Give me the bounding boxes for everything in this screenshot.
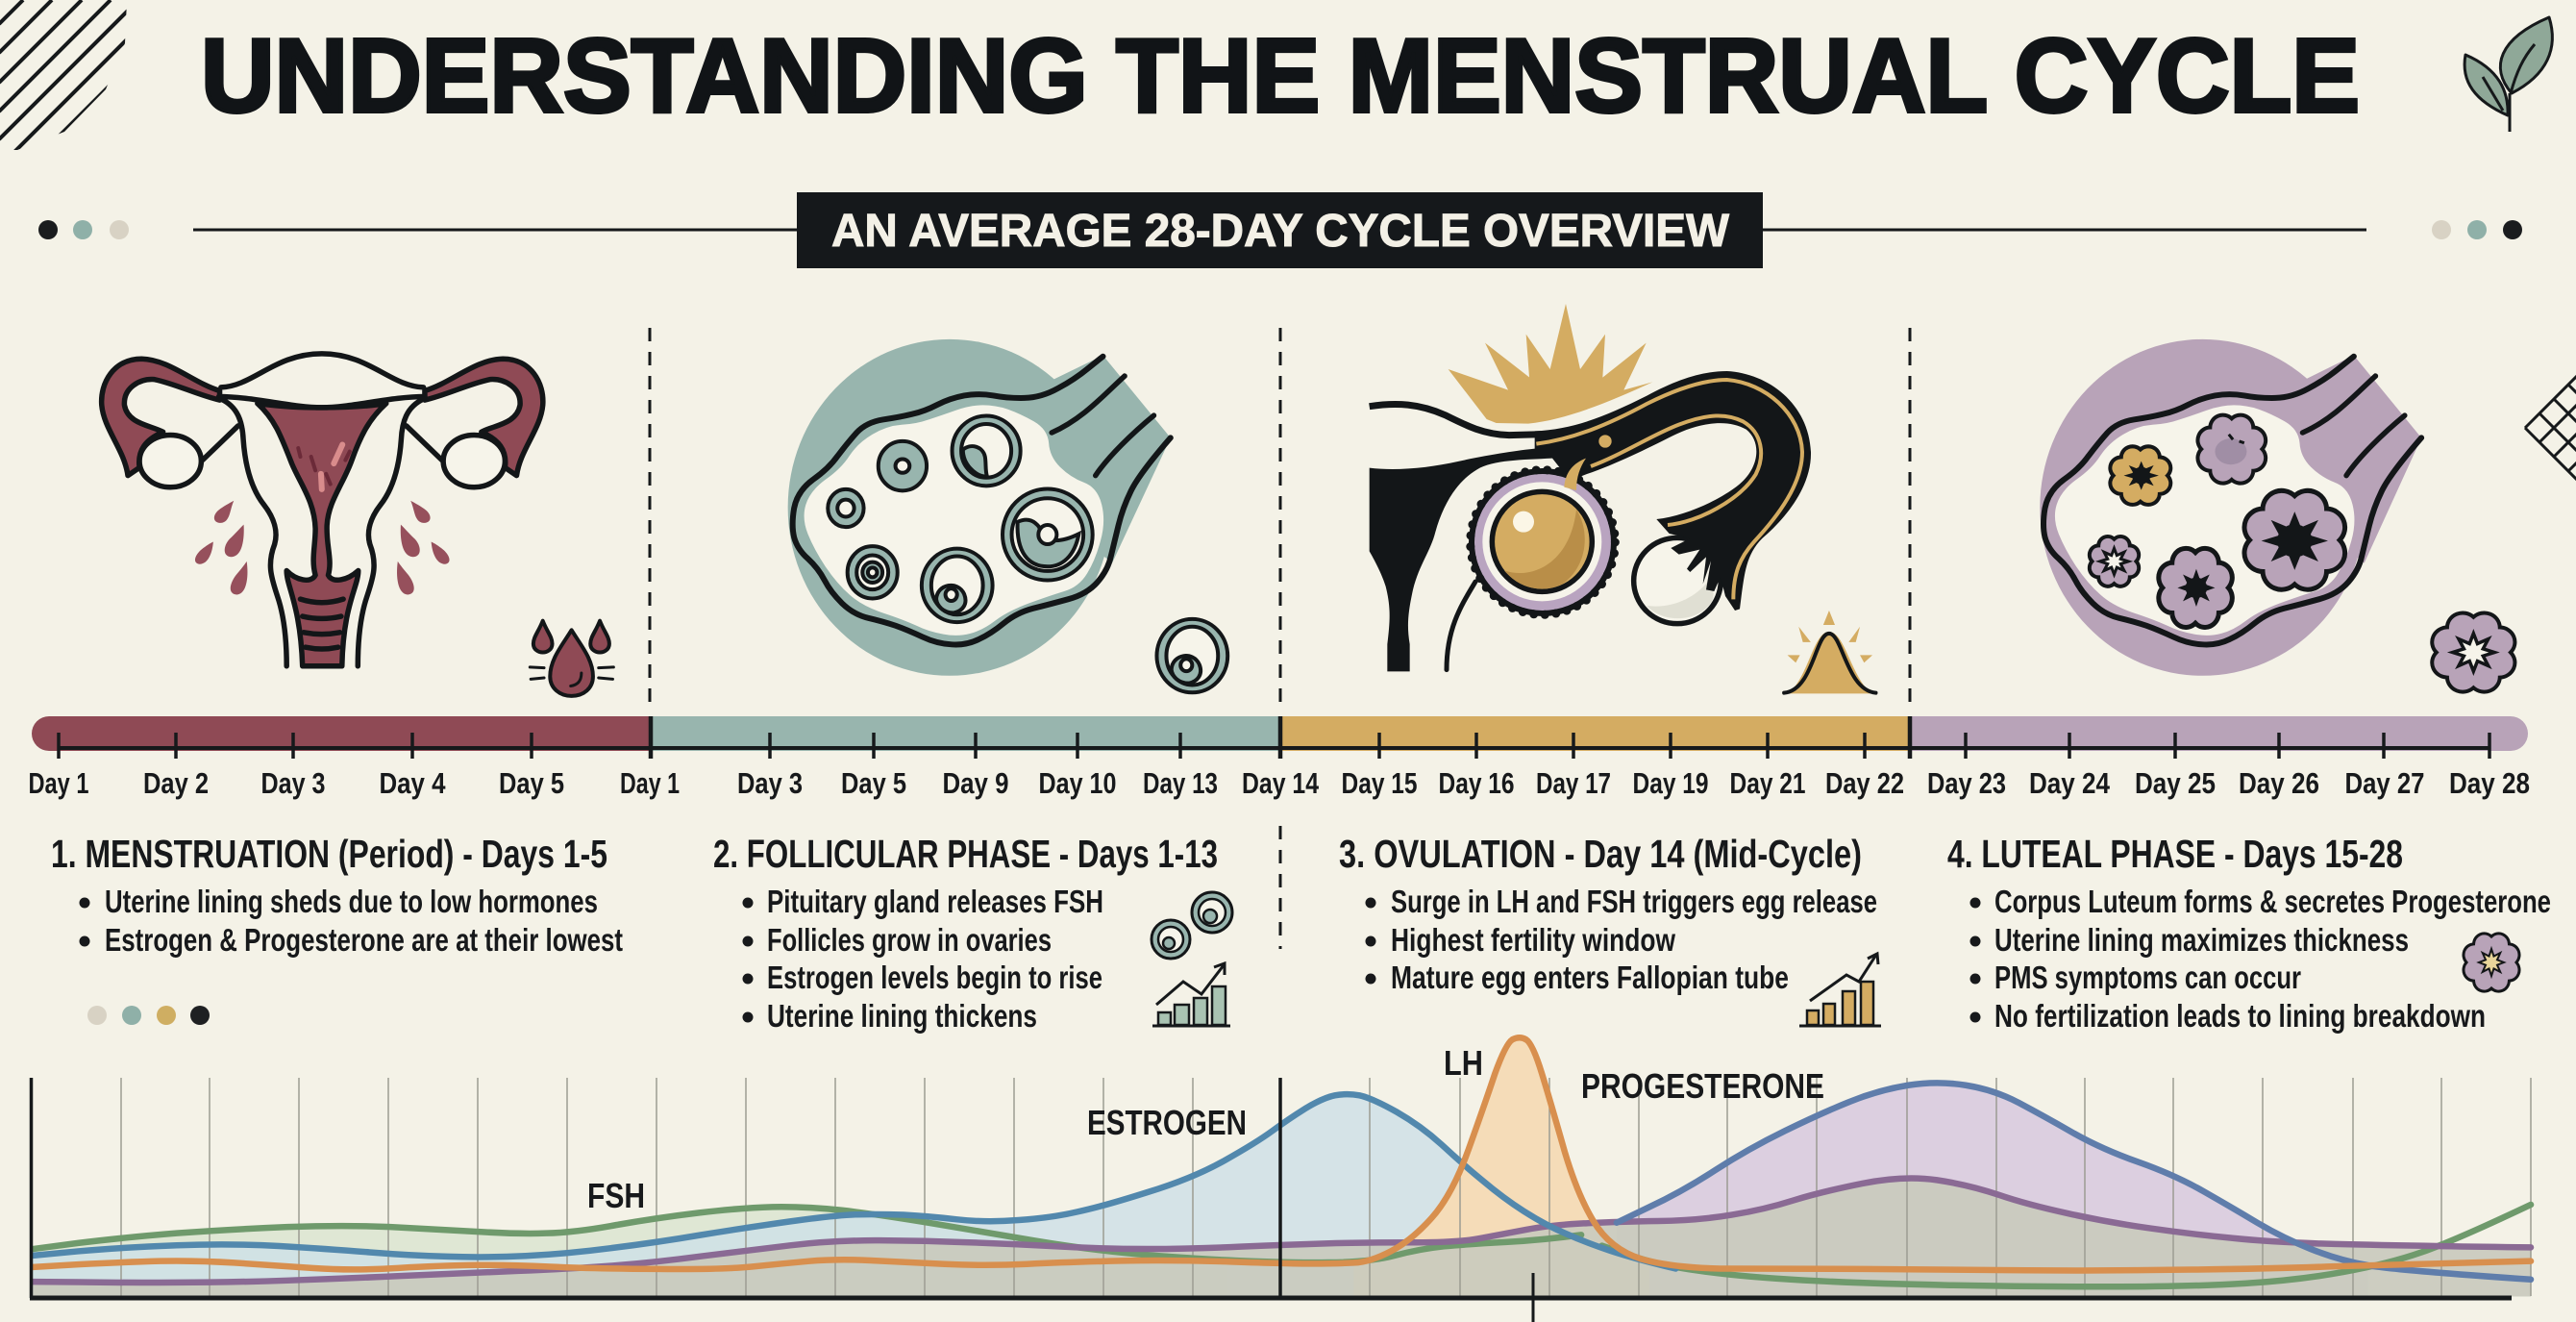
panel: menstruation text: 1. MENSTRUATION (Period) - Days 1-5 — [51, 832, 607, 876]
panel: ovulation text: 3. OVULATION - Day 14 (Mid-Cycle) — [1339, 832, 1862, 876]
decoration: diagonal stripes — [0, 0, 127, 150]
day labels: Day 16 — [1438, 766, 1515, 800]
chart: hormone levels: ESTROGEN — [1087, 1103, 1247, 1142]
day labels: Day 24 — [2029, 766, 2111, 800]
decorative dots right — [2432, 220, 2522, 239]
panel: follicular text: Pituitary gland releases FSH — [767, 885, 1103, 920]
panel: luteal text — [1947, 832, 2551, 1035]
day labels: Day 10 — [1038, 766, 1117, 800]
day labels: Day 23 — [1927, 766, 2006, 800]
day labels: Day 5 — [499, 766, 564, 800]
chart: hormone levels: FSH — [587, 1176, 645, 1215]
chart: hormone levels: LH — [1444, 1043, 1483, 1083]
day labels: Day 13 — [1143, 766, 1218, 800]
day labels: Day 1 — [620, 766, 680, 800]
decorative dots left — [38, 220, 129, 239]
timeline bar — [32, 716, 2528, 759]
illustration: ovary with growing follicles — [788, 339, 1171, 676]
day labels: Day 3 — [261, 766, 325, 800]
panel: luteal text: PMS symptoms can occur — [1994, 960, 2301, 996]
day labels: Day 25 — [2135, 766, 2216, 800]
panel: menstruation text: Uterine lining sheds due to low hormones — [105, 885, 598, 920]
day labels: Day 3 — [737, 766, 803, 800]
day labels: Day 27 — [2345, 766, 2424, 800]
legend dots — [87, 1006, 210, 1025]
day labels: Day 15 — [1342, 766, 1417, 800]
panel: follicular text: 2. FOLLICULAR PHASE - Days 1-13 — [713, 832, 1218, 876]
day labels: Day 1 — [29, 766, 88, 800]
subtitle banner: AN AVERAGE 28-DAY CYCLE OVERVIEW — [831, 206, 1730, 257]
icon: rising chart gold — [1799, 954, 1881, 1026]
day labels: Day 19 — [1632, 766, 1709, 800]
panel: follicular text — [713, 832, 1218, 1035]
day labels: Day 21 — [1730, 766, 1805, 800]
title: UNDERSTANDING THE MENSTRUAL CYCLE — [201, 17, 2360, 135]
decoration: crosshatch diamond — [2525, 370, 2576, 486]
icon: corpus luteum — [2432, 612, 2514, 692]
panel: ovulation text — [1339, 832, 1877, 996]
icon: leaf — [2465, 17, 2552, 132]
day labels: Day 9 — [942, 766, 1009, 800]
day labels: Day 28 — [2449, 766, 2530, 800]
illustration: uterus — [102, 354, 543, 666]
icon: blood drops — [530, 621, 613, 696]
day labels: Day 17 — [1536, 766, 1611, 800]
panel: menstruation text: Estrogen & Progesterone are at their lowest — [105, 923, 623, 959]
illustration: ovulation with egg release — [1370, 304, 1811, 671]
icon: small follicles — [1152, 892, 1232, 959]
icon: LH surge curve — [1784, 611, 1876, 693]
icon: rising chart green — [1152, 963, 1230, 1026]
panel: follicular text: Follicles grow in ovaries — [767, 923, 1052, 959]
chart: hormone levels: PROGESTERONE — [1581, 1066, 1824, 1106]
panel: ovulation text: Surge in LH and FSH triggers egg release — [1391, 885, 1877, 920]
panel: menstruation text — [51, 832, 623, 959]
chart: hormone levels — [30, 1037, 2531, 1322]
day labels: Day 2 — [143, 766, 209, 800]
panel: follicular text: Estrogen levels begin to rise — [767, 960, 1102, 996]
panel: luteal text: 4. LUTEAL PHASE - Days 15-28 — [1947, 832, 2403, 876]
day labels: Day 4 — [379, 766, 446, 800]
illustration: ovary with corpus luteum — [2040, 339, 2421, 676]
day labels: Day 14 — [1242, 766, 1320, 800]
panel: luteal text: Uterine lining maximizes thickness — [1994, 923, 2409, 959]
day labels: Day 5 — [841, 766, 906, 800]
day labels: Day 22 — [1825, 766, 1904, 800]
panel: ovulation text: Mature egg enters Fallopian tube — [1391, 960, 1789, 996]
panel: ovulation text: Highest fertility window — [1391, 923, 1676, 959]
day labels: Day 26 — [2239, 766, 2319, 800]
icon: small corpus luteum — [2464, 934, 2519, 991]
subtitle banner — [797, 192, 1763, 268]
day labels — [29, 766, 2530, 800]
icon: follicle — [1156, 619, 1227, 692]
panel: follicular text: Uterine lining thickens — [767, 999, 1037, 1035]
